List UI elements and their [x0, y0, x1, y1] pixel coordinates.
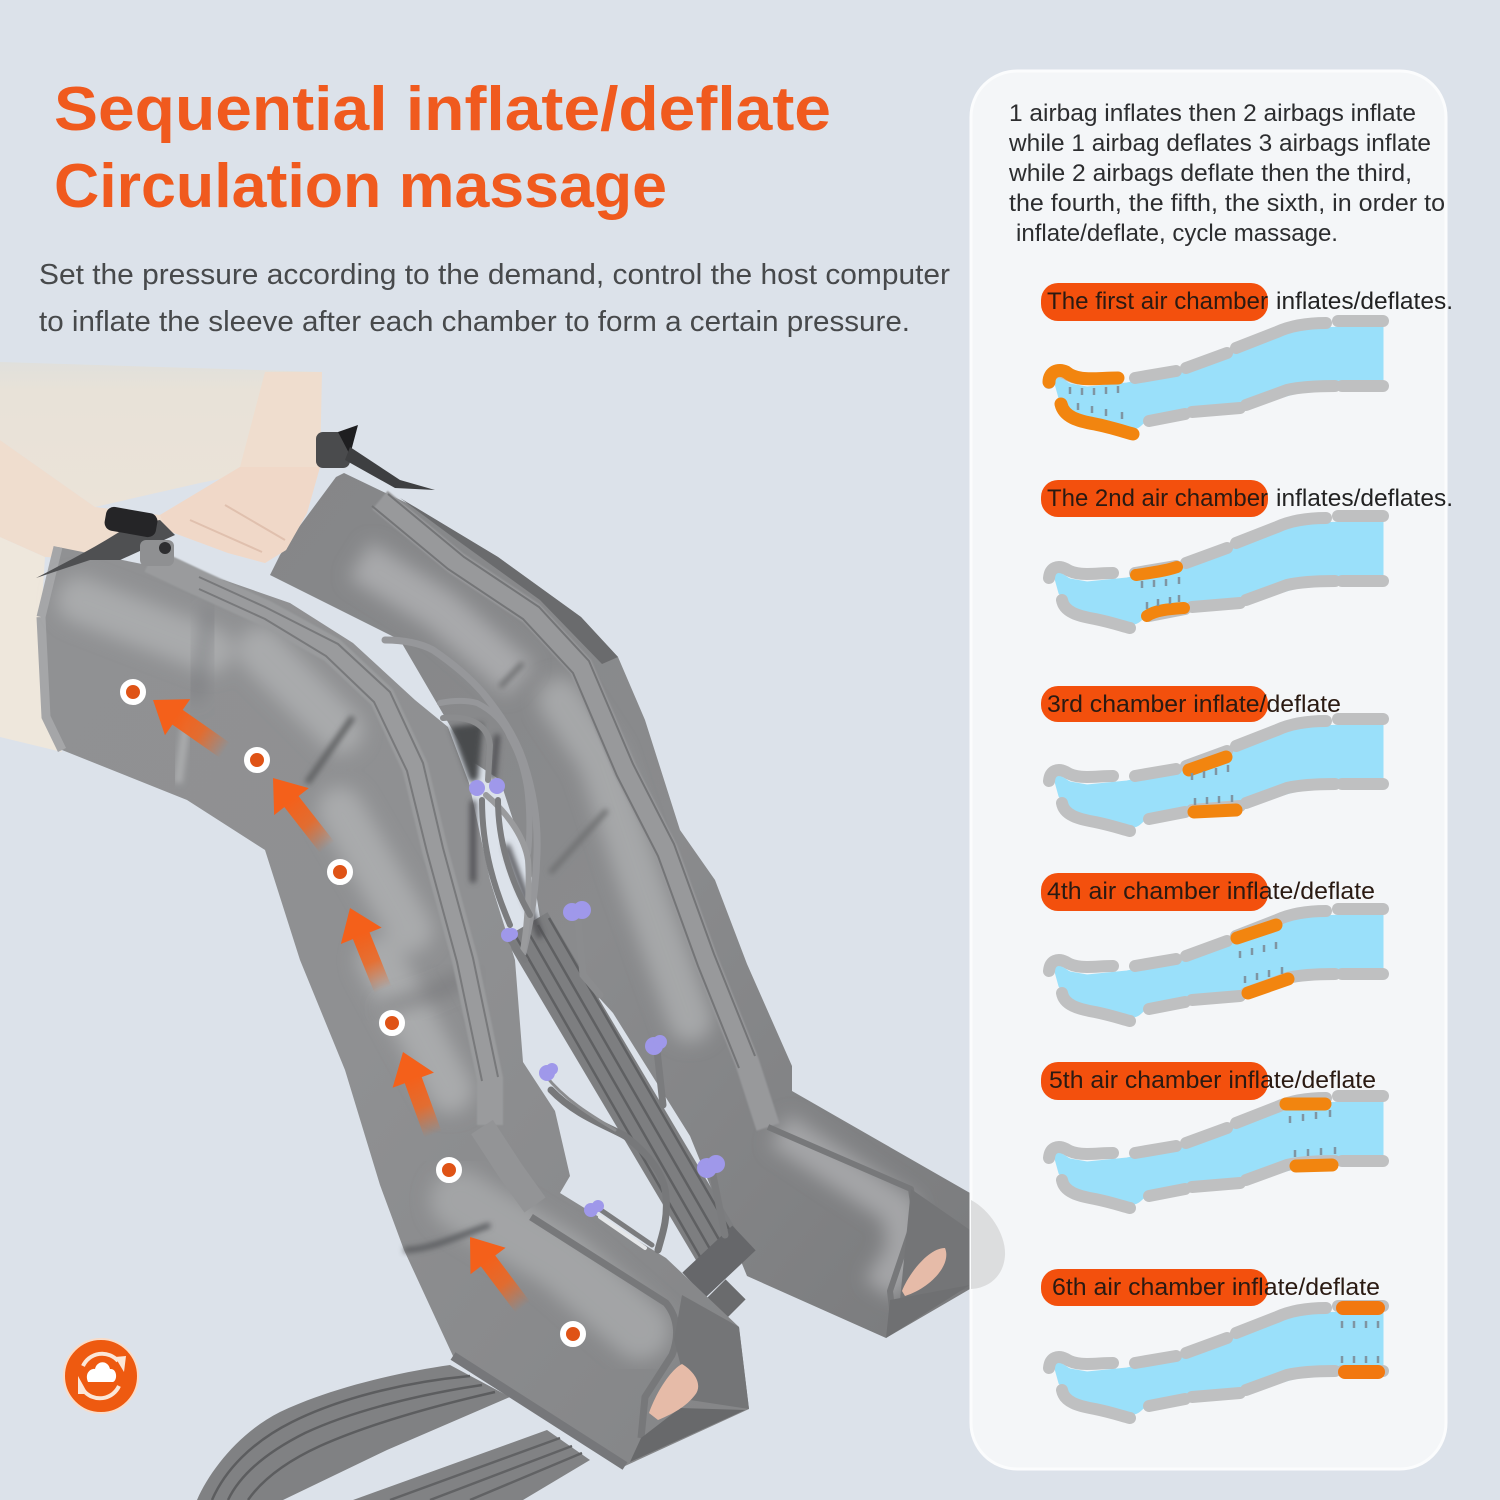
chamber 5: [1041, 1062, 1383, 1208]
chamber 1: [1041, 283, 1453, 434]
chamber 4: 4th air chamber inflate/deflate: [1047, 878, 1375, 905]
straps and buckles: [36, 425, 435, 578]
panel description: 1 airbag inflates then 2 airbags inflate: [1009, 100, 1416, 127]
panel description: [1008, 100, 1445, 247]
arrow 3: [330, 900, 403, 998]
circulation arrows and points: [123, 682, 583, 1344]
intro text: to inflate the sleeve after each chamber to form a certain pressure.: [39, 306, 910, 338]
icon: circulation cloud: [64, 1339, 138, 1413]
panel description: while 2 airbags deflate then the third,: [1008, 160, 1412, 187]
chamber 2: [1041, 480, 1453, 628]
arrow 1: [140, 682, 238, 768]
panel description: the fourth, the fifth, the sixth, in order to: [1009, 190, 1445, 217]
chamber 1: The first air chamber: [1047, 288, 1268, 315]
intro text: [39, 259, 950, 338]
chamber 3: [1041, 686, 1383, 831]
title: [54, 75, 831, 221]
arrow 2: [256, 764, 345, 861]
intro text: Set the pressure according to the demand, control the host computer: [39, 259, 950, 291]
foot cuff of front sleeve: [531, 1217, 677, 1438]
chamber 6: 6th air chamber inflate/deflate: [1052, 1274, 1380, 1301]
air tubes and connectors: [385, 640, 725, 1250]
toes: back foot: [902, 1248, 946, 1296]
chamber 1: inflates/deflates.: [1276, 288, 1453, 315]
purple connectors: [469, 778, 725, 1217]
panel description: inflate/deflate, cycle massage.: [1016, 220, 1338, 247]
title: Sequential inflate/deflate: [54, 75, 831, 144]
sock edge beside panel: [971, 1200, 1005, 1289]
chamber 5: 5th air chamber inflate/deflate: [1049, 1067, 1376, 1094]
title: Circulation massage: [54, 152, 667, 221]
chamber 2: The 2nd air chamber: [1047, 485, 1268, 512]
back leg sleeve: [270, 473, 970, 1338]
hands and clothing: [0, 362, 322, 752]
hose band on the floor: [197, 1365, 590, 1500]
chamber 3: 3rd chamber inflate/deflate: [1047, 691, 1341, 718]
point markers: [123, 682, 583, 1344]
chamber 6: [1041, 1269, 1383, 1418]
front leg sleeve: [41, 547, 749, 1466]
arrow 4: [382, 1044, 454, 1142]
panel description: while 1 airbag deflates 3 airbags inflate: [1008, 130, 1431, 157]
chamber 4: [1041, 873, 1383, 1021]
panel: chamber sequence: [971, 71, 1453, 1469]
arrow 5: [452, 1224, 541, 1321]
panel background: [971, 71, 1446, 1469]
toes: front foot: [649, 1364, 698, 1420]
chamber 2: inflates/deflates.: [1276, 485, 1453, 512]
bundled tube strip: [515, 918, 744, 1310]
photo: person wearing leg compression sleeves: [0, 362, 970, 1500]
